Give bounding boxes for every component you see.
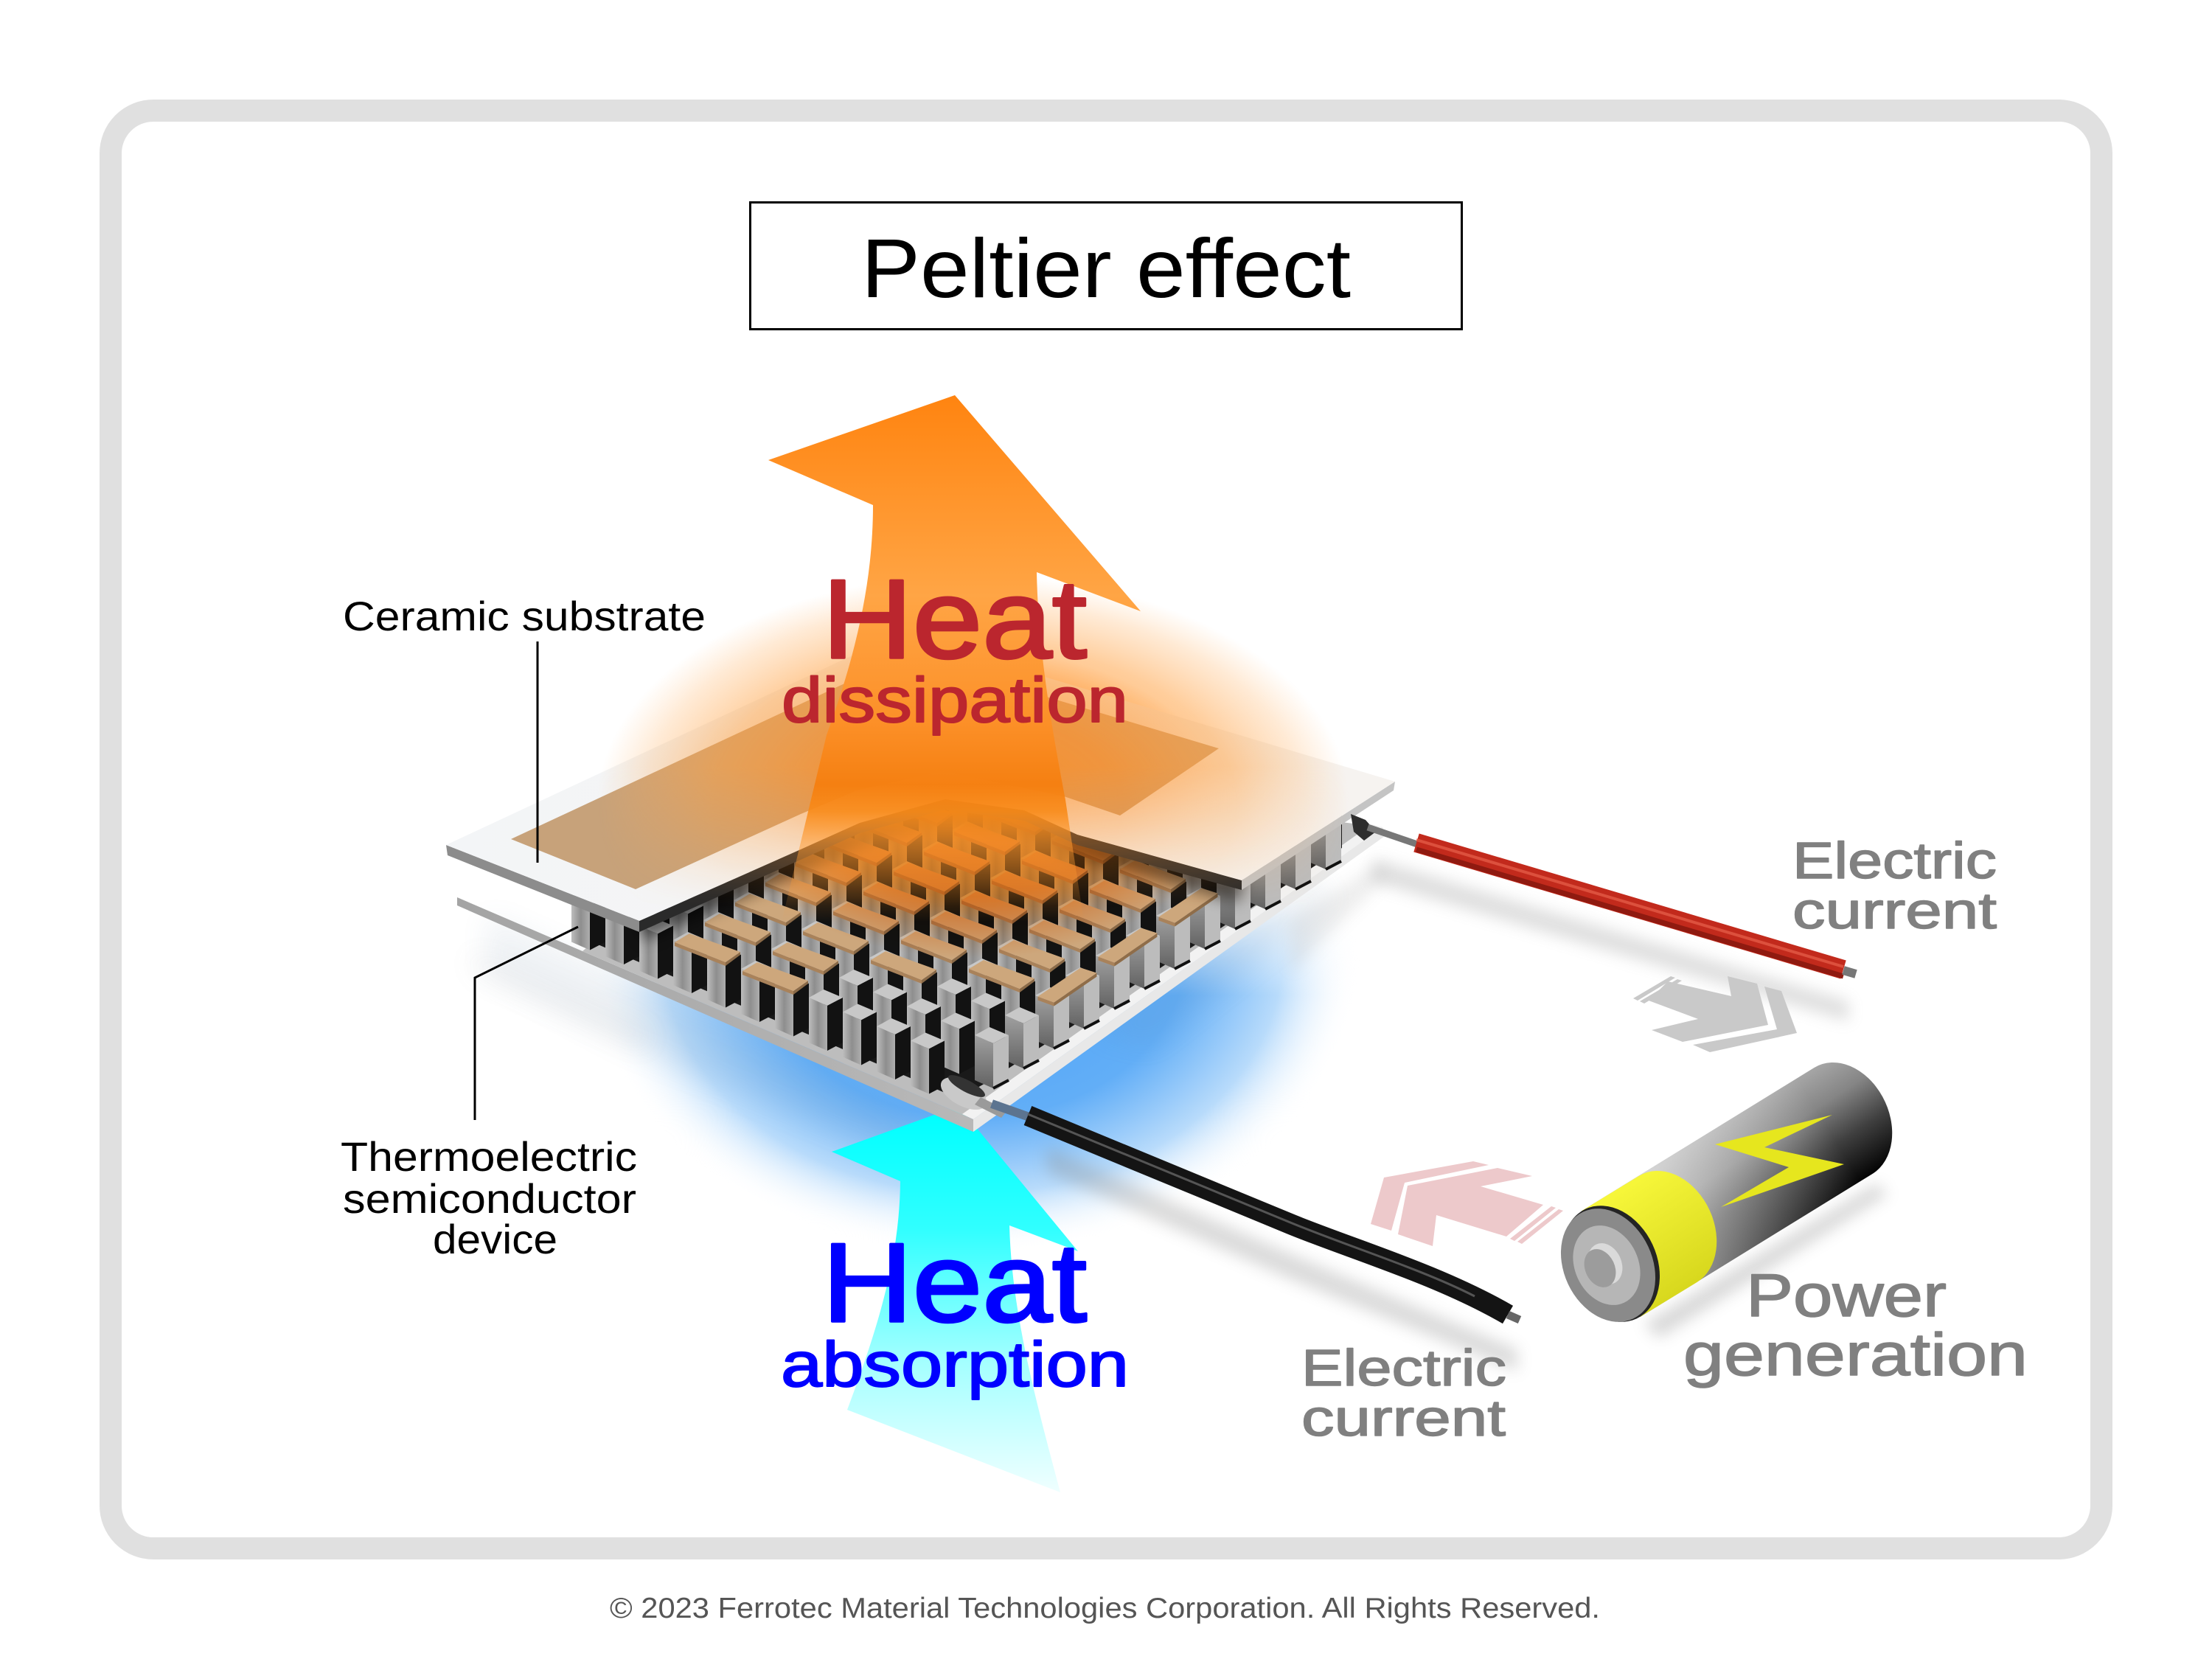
shadow under the cut-away edge — [639, 808, 1242, 929]
pink current direction arrow — [1371, 1161, 1563, 1246]
wire terminal — [1351, 814, 1376, 841]
orange heat dissipation arrow — [768, 395, 1141, 922]
heat dissipation label: dissipation — [782, 665, 1128, 736]
rounded grey frame panel — [111, 111, 2101, 1548]
heat dissipation label: Heat — [822, 557, 1087, 682]
battery shadow — [1644, 1183, 1888, 1338]
top ceramic plate — [446, 633, 1395, 921]
battery terminal end — [1543, 1189, 1678, 1338]
title box: Peltier effect — [861, 222, 1351, 315]
black wire — [992, 1104, 1520, 1320]
heat absorption label: Heat — [822, 1220, 1087, 1346]
heat dissipation label — [782, 557, 1128, 736]
thermoelectric semiconductor device label with leader line: semiconductor — [343, 1175, 636, 1222]
electric current label lower: Electric — [1301, 1339, 1506, 1397]
electric current label upper — [1792, 832, 1997, 939]
blue cold glow — [616, 911, 1332, 1231]
thermoelectric module — [446, 633, 1395, 1132]
lightning bolt — [1715, 1115, 1844, 1207]
battery body — [1582, 1062, 1892, 1317]
cyan heat absorption arrow — [832, 1106, 1078, 1492]
heat absorption label: absorption — [781, 1329, 1129, 1400]
copper layer on top plate — [511, 655, 1219, 889]
dark interior of module — [582, 811, 1342, 1099]
orange tint on pellets below the heat arrow — [723, 649, 1224, 959]
thermoelectric semiconductor device label with leader line — [341, 927, 637, 1262]
top ceramic plate left edge — [446, 845, 639, 932]
semiconductor pellet array with copper pads — [571, 650, 1341, 1094]
top ceramic plate right edge — [1242, 782, 1395, 890]
title box — [751, 202, 1461, 329]
battery — [1543, 1062, 1892, 1338]
yellow band — [1582, 1171, 1717, 1317]
copyright footer: © 2023 Ferrotec Material Technologies Corporation. All Rights Reserved. — [610, 1593, 1600, 1624]
power generation label: Power — [1746, 1262, 1947, 1329]
thermoelectric semiconductor device label with leader line: device — [433, 1216, 557, 1262]
heat absorption label — [781, 1220, 1129, 1400]
power generation label: generation — [1683, 1321, 2028, 1388]
bottom ceramic plate — [457, 811, 1385, 1132]
top ceramic plate cut edge — [639, 799, 1242, 932]
soft shadows under device and wires — [472, 859, 1848, 1371]
ceramic substrate label with leader line: Ceramic substrate — [343, 593, 706, 639]
orange heat glow over module — [609, 584, 1339, 900]
solder joint and wire mesh — [936, 1071, 1007, 1118]
thermoelectric semiconductor device label with leader line: Thermoelectric — [341, 1133, 637, 1180]
electric current label lower — [1301, 1339, 1506, 1447]
electric current label upper: Electric — [1792, 832, 1997, 889]
electric current label lower: current — [1301, 1389, 1506, 1447]
red wire — [1368, 827, 1856, 976]
electric current label upper: current — [1792, 882, 1997, 939]
power generation label — [1683, 1262, 2028, 1388]
grey current direction arrow — [1633, 976, 1797, 1052]
